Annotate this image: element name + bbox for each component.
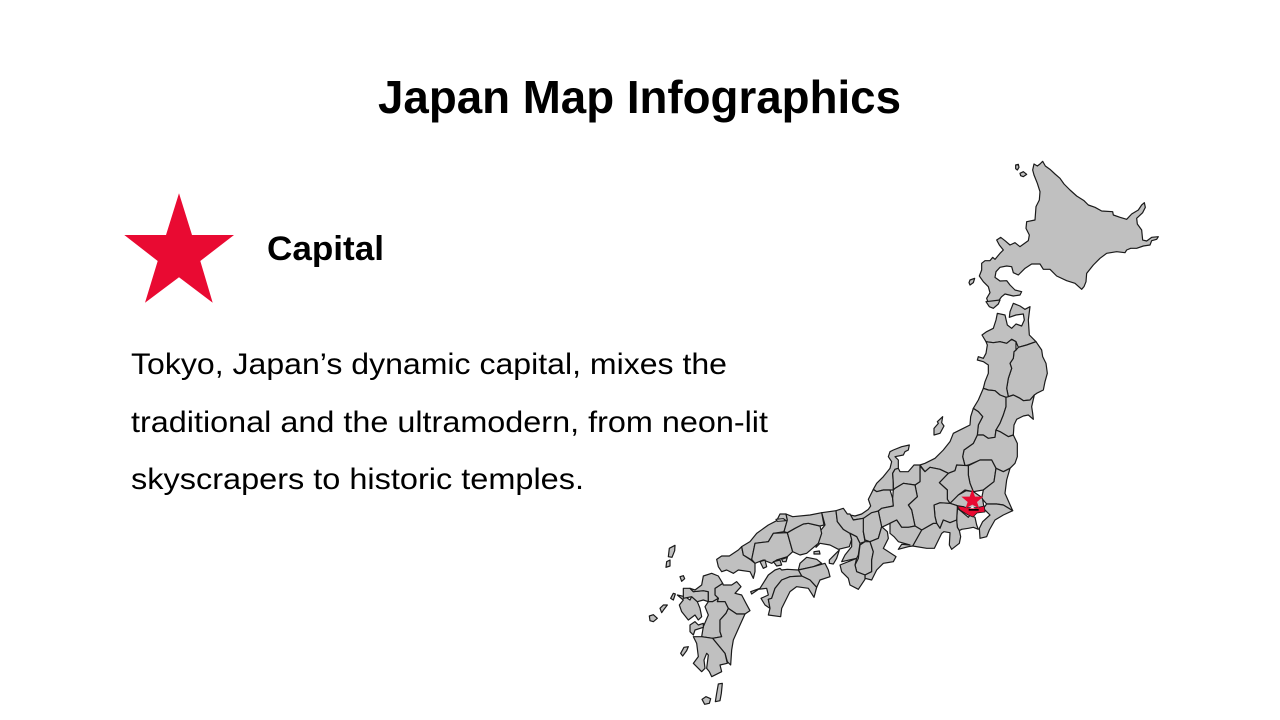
text block: description: skyscrapers to historic temples. — [131, 463, 584, 496]
region: Chubu and Kanto — [850, 408, 1017, 549]
heading: capital: Capital — [267, 230, 384, 268]
map of Japan — [649, 161, 1158, 704]
region: Tohoku — [934, 300, 1047, 438]
region: Kyushu — [649, 545, 750, 704]
region: Kansai — [814, 508, 896, 589]
icon: capital star marker — [961, 489, 983, 509]
title: Japan Map Infographics — [378, 71, 901, 123]
Tokyo highlight — [957, 489, 985, 517]
text block: description: traditional and the ultramodern, from neon-lit — [131, 406, 769, 439]
text block: description — [131, 348, 769, 496]
text block: description: Tokyo, Japan’s dynamic capital, mixes the — [131, 348, 727, 381]
icon: red star — [124, 193, 234, 303]
region: Hokkaido — [969, 161, 1158, 307]
region: Chugoku and Shikoku — [717, 513, 830, 617]
